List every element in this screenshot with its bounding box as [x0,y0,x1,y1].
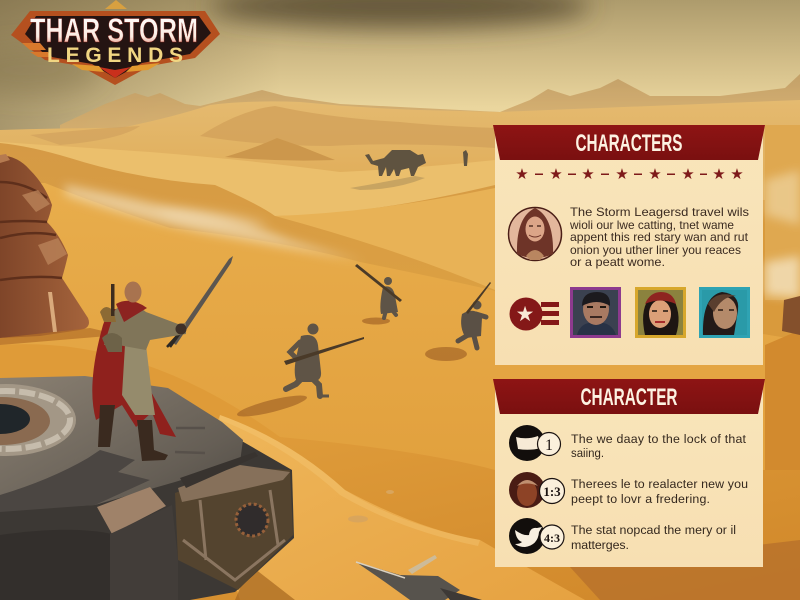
item three [509,518,736,554]
banner: character: CHARACTER [580,384,678,411]
item one [509,425,747,461]
description text: wioli our lwe catting, tnet wame [569,218,734,232]
carved block [175,468,293,590]
logo badge [11,11,220,85]
item three: The stat nopcad the mery or il [571,523,736,537]
description text: onion you uther liner you reaces [570,243,741,257]
item three: matterges. [571,538,629,552]
shadowed slope [0,143,495,300]
star divider: ★ [681,166,695,183]
item one: 1 [545,437,553,454]
lit middle slope [275,188,495,290]
stone platform [0,376,294,600]
portrait: woman with red headscarf [636,288,684,336]
star divider [515,166,744,183]
pack [102,333,122,352]
panel: characters [493,125,765,365]
description text: appent this red stary wan and rut [570,230,749,244]
blowing dust [65,185,365,262]
carved ring [0,384,76,456]
portrait medallion [508,208,562,260]
right edge dunes [765,125,800,300]
camel caravan silhouette [350,150,468,190]
banner: characters [493,125,765,160]
soldier two [355,264,402,324]
item two [509,472,748,508]
star divider: ★ [581,166,595,183]
portrait: man [572,288,620,336]
distant dunes [0,100,800,200]
title line one: THAR STORM [30,12,198,50]
star divider: ★ [615,166,629,183]
description text: or a peatt wome. [570,255,665,269]
sword [172,256,233,345]
star divider: ★ [730,166,744,183]
portrait: woman on teal [700,288,748,336]
platform lower body [0,378,294,600]
description text: The Storm Leagersd travel wils [570,205,749,219]
item one: saiing. [571,446,604,460]
description text [569,205,749,269]
tunic [122,345,155,415]
star divider: ★ [712,166,726,183]
icon: star emblem: ★ [516,303,534,326]
left domed ruin [0,154,120,345]
cloak [92,309,176,437]
platform top [0,376,243,510]
bottom dark dune [570,540,800,600]
item two: Therees le to realacter new you [571,477,748,491]
item one: The we daay to the lock of that [571,432,747,446]
foreground ground [0,344,580,600]
panel: character [493,379,765,567]
star divider: ★ [648,166,662,183]
soldier one [236,324,364,421]
banner: character [493,379,765,414]
collar [116,301,147,322]
title line two: LEGENDS [47,44,183,67]
logo [11,0,220,85]
broken slab [97,487,166,534]
wreckage in sand [356,555,482,600]
near slope [0,183,800,600]
icon: star emblem [510,298,559,330]
item two: 1:3 [543,484,561,499]
lower plating [0,530,178,600]
star divider: ★ [549,166,563,183]
cast shadow [0,450,150,512]
soldier three [425,282,491,361]
legs [98,405,115,447]
hero warrior [92,256,233,461]
bright foreground dune [200,415,585,600]
head [124,282,142,302]
item three: 4:3 [544,531,560,545]
item two: peept to lovr a fredering. [571,492,710,506]
banner: characters: CHARACTERS [576,130,682,157]
star divider: ★ [515,166,529,183]
far mountains [60,74,800,140]
middle ridge dune [225,138,335,161]
central soldiers [236,264,491,421]
